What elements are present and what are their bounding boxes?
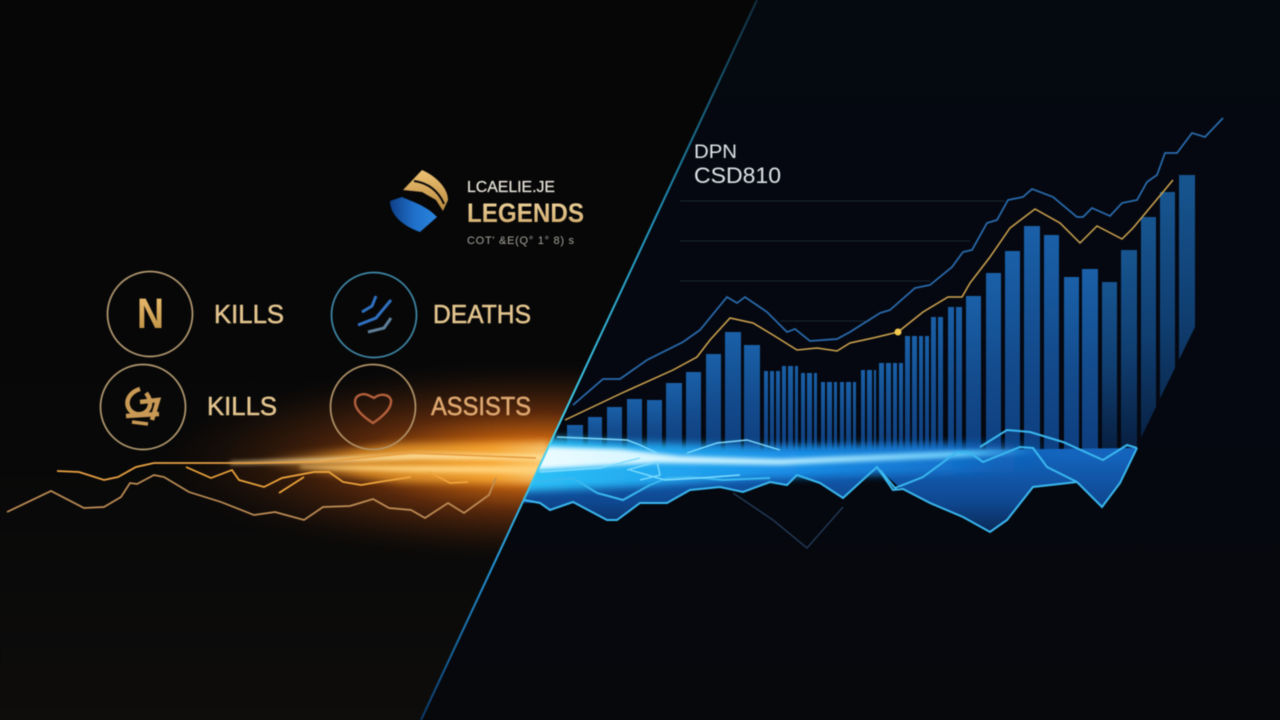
upper orange line <box>57 453 536 480</box>
bright strand upper <box>230 453 550 464</box>
logo top line text: LCAELIE.JE <box>467 179 555 196</box>
dim shadow wave <box>733 493 843 548</box>
orange energy stream <box>6 372 580 550</box>
stat: assists <box>330 364 531 450</box>
diagonal divider line <box>421 0 757 720</box>
logo wordmark: LEGENDS <box>467 198 584 228</box>
stat: deaths <box>332 272 531 358</box>
icon ring <box>108 272 192 356</box>
logo <box>390 170 584 247</box>
logo mark: blue swoosh <box>390 197 437 232</box>
bar chart <box>567 175 1195 450</box>
icon ring <box>100 364 186 450</box>
orange glow <box>198 372 580 550</box>
icon: N glyph: N <box>137 290 164 338</box>
lower electric wave lines <box>524 430 1137 532</box>
icon: gold emblem <box>126 389 159 424</box>
logo mark: crescent cut <box>414 181 444 204</box>
stat: kills second <box>100 364 277 450</box>
blue line series <box>573 118 1223 405</box>
gold line series <box>565 180 1173 420</box>
gold marker <box>894 328 902 336</box>
icon: blue scribble <box>358 296 391 332</box>
grid lines <box>680 201 1005 321</box>
logo small caption: COT' &E(Q° 1° 8) s <box>467 235 574 247</box>
label: KILLS <box>207 391 277 421</box>
icon: heart <box>355 394 391 423</box>
label: ASSISTS <box>431 391 531 421</box>
label: KILLS <box>214 299 284 329</box>
pale lightning strands <box>540 437 780 480</box>
stat: kills <box>108 272 284 356</box>
background: right navy half <box>421 0 1280 720</box>
blue glow band <box>510 436 1060 492</box>
blue filled wave area <box>505 448 1137 532</box>
lower jagged orange line <box>7 475 496 520</box>
orange branches <box>186 467 468 493</box>
chart heading <box>694 142 781 188</box>
label: DEATHS <box>433 299 531 329</box>
icon ring <box>330 364 416 450</box>
bright white-blue band <box>525 446 1040 470</box>
heading line two: CSD810 <box>694 163 781 188</box>
blue chart area <box>505 118 1223 548</box>
icon ring <box>332 272 416 358</box>
logo mark: gold swoosh <box>403 170 448 211</box>
bright strand lower <box>300 466 550 474</box>
heading line one: DPN <box>694 142 737 163</box>
wide orange body <box>260 442 550 484</box>
